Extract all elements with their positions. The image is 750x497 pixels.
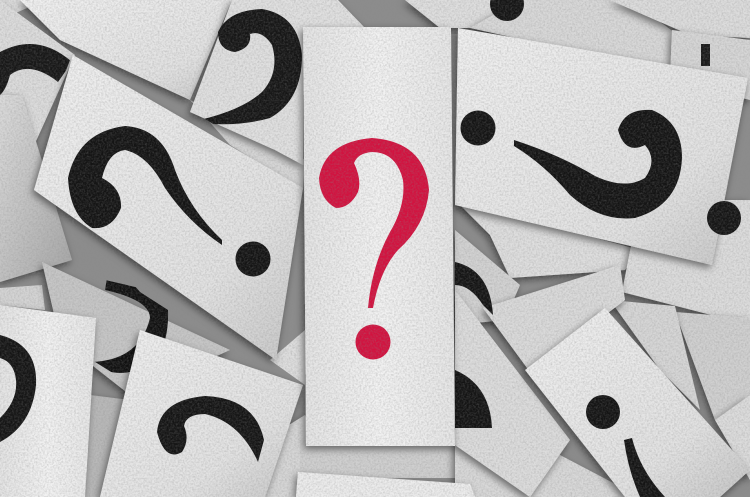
question mark: upper back (204, 9, 302, 124)
question mark: left card (68, 126, 270, 276)
tail fragment top right (701, 44, 710, 66)
question mark: red (319, 138, 429, 360)
card: right lower back with dark question mark fragment (455, 290, 570, 497)
question mark fragment: behind right (455, 262, 493, 315)
card: right with sideways question mark (455, 28, 748, 265)
question mark: top edge fragment (490, 0, 524, 21)
card: centre with red question mark (303, 27, 455, 446)
question mark: middle back fragment (94, 280, 168, 373)
dot on back right card (707, 201, 741, 235)
question mark: top left fragment (0, 44, 72, 95)
card: bottom left with question mark (0, 305, 96, 497)
card: lower right with dot and tail (525, 308, 750, 497)
card: bottom with question mark (100, 330, 303, 497)
question mark: bottom card (157, 396, 264, 462)
question mark: right card (460, 110, 682, 219)
card: left with tilted question mark (34, 55, 303, 360)
card: upper back with black question mark (190, 0, 365, 165)
